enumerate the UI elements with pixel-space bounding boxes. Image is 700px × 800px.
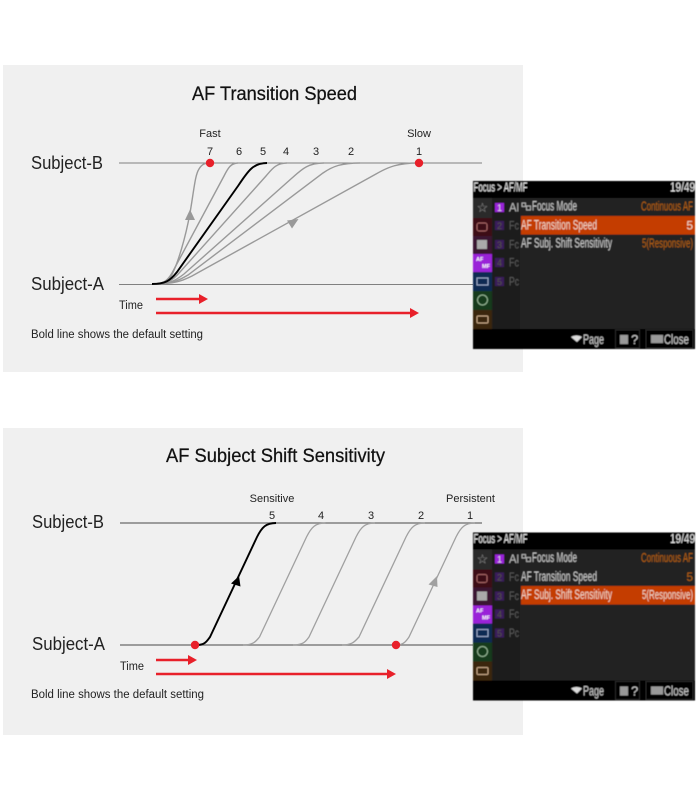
speed labels: 6	[236, 146, 242, 158]
chart: shift curves	[243, 523, 475, 645]
menu main list	[520, 550, 695, 680]
menu sub-tab column: Al	[509, 200, 519, 214]
menu main list: 5	[686, 218, 693, 232]
arrowheads on curves	[185, 210, 298, 228]
menu sub-tab column: 2	[497, 221, 502, 231]
sensitivity labels: 1	[467, 510, 473, 522]
menu sub-tab column: Fc	[509, 218, 519, 232]
sensitivity labels	[250, 493, 495, 522]
sensitivity labels: 3	[368, 510, 374, 522]
time arrows	[156, 294, 419, 318]
speed labels: 1	[416, 146, 422, 158]
red markers	[191, 641, 400, 649]
chart: transition curves	[152, 163, 418, 284]
menu sidebar tabs: ☆	[477, 200, 488, 215]
menu header: Focus > AF/MF	[474, 532, 528, 546]
menu main list: AF Transition Speed	[521, 569, 597, 584]
menu header	[474, 532, 695, 546]
menu sub-tab column: 2	[497, 572, 502, 582]
sensitivity labels: 5	[269, 510, 275, 522]
menu sidebar tabs: ☆	[477, 552, 488, 566]
panel: AF Transition Speed	[3, 65, 523, 372]
time arrows	[156, 655, 396, 679]
menu sidebar tabs: MF	[482, 616, 491, 622]
menu footer: ?	[631, 684, 638, 698]
menu footer: Page	[583, 682, 604, 698]
menu footer: Close	[664, 682, 689, 698]
menu sub-tab column: 1	[497, 554, 502, 564]
menu sub-tab column: Fc	[509, 570, 519, 584]
menu sidebar tabs	[473, 550, 492, 680]
heading: AF Subject Shift Sensitivity: AF Subject Shift Sensitivity	[166, 446, 385, 467]
menu main list: AF Subj. Shift Sensitivity	[521, 587, 612, 602]
label: Subject-A: Subject-A	[31, 274, 104, 294]
menu sub-tab column	[492, 198, 520, 329]
camera menu: AF Transition Speed selected	[473, 180, 695, 349]
icon: focus mode	[522, 203, 530, 210]
menu sub-tab column: Pc	[509, 626, 519, 640]
sensitivity labels: Persistent	[446, 493, 495, 505]
note: Bold line shows the default setting	[31, 329, 203, 341]
menu main list: Focus Mode	[532, 550, 577, 565]
subject lines	[119, 163, 482, 284]
menu sub-tab column: Fc	[509, 238, 519, 252]
menu sub-tab column: Fc	[509, 256, 519, 270]
menu sidebar tabs: MF	[482, 264, 491, 270]
menu sidebar tabs: AF	[476, 608, 484, 614]
gray arrowhead	[428, 576, 438, 587]
sensitivity labels: 4	[318, 510, 324, 522]
menu sub-tab column: 5	[497, 277, 502, 287]
speed labels: Slow	[407, 128, 431, 140]
bold default curve	[152, 163, 267, 284]
menu sub-tab column: Pc	[509, 274, 519, 288]
menu sub-tab column	[492, 550, 520, 680]
subject lines	[120, 523, 482, 645]
menu main list: Focus Mode	[532, 198, 577, 214]
label: Time: Time	[120, 661, 144, 673]
menu main list: 5	[686, 570, 693, 584]
label: Subject-B: Subject-B	[32, 512, 104, 532]
camera menu: AF Subj. Shift Sensitivity selected	[473, 532, 695, 700]
menu sub-tab column: Fc	[509, 589, 519, 603]
menu sub-tab column: 5	[497, 628, 502, 638]
menu main list	[520, 198, 695, 329]
menu footer: ?	[631, 332, 638, 347]
speed labels: 2	[348, 146, 354, 158]
menu sub-tab column: 1	[497, 203, 502, 213]
heading: AF Transition Speed: AF Transition Speed	[192, 84, 357, 105]
menu sub-tab column: 4	[497, 258, 502, 268]
icon: focus mode	[522, 554, 530, 562]
red markers	[206, 159, 423, 167]
speed labels: 5	[260, 146, 266, 158]
menu footer	[473, 680, 695, 700]
menu sidebar tabs	[473, 198, 492, 329]
speed labels: 7	[207, 146, 213, 158]
menu sub-tab column: 3	[497, 240, 502, 250]
menu main list: AF Transition Speed	[521, 218, 597, 232]
menu sub-tab column: Al	[509, 552, 519, 566]
menu main list: AF Subj. Shift Sensitivity	[521, 236, 612, 250]
label: Subject-B: Subject-B	[31, 153, 103, 173]
panel: AF Subject Shift Sensitivity	[3, 428, 523, 735]
sensitivity labels: Sensitive	[250, 493, 294, 505]
menu footer	[473, 329, 695, 349]
speed labels	[199, 128, 431, 158]
menu header	[474, 180, 695, 194]
bold default curve	[197, 523, 276, 645]
note: Bold line shows the default setting	[31, 689, 204, 701]
label: Subject-A: Subject-A	[32, 634, 105, 654]
menu footer: Page	[583, 331, 604, 347]
speed labels: 4	[283, 146, 289, 158]
menu sub-tab column: 3	[497, 592, 502, 602]
menu sub-tab column: Fc	[509, 607, 519, 621]
label: Time: Time	[119, 300, 143, 312]
menu sub-tab column: 4	[497, 610, 502, 620]
speed labels: 3	[313, 146, 319, 158]
sensitivity labels: 2	[418, 510, 424, 522]
menu header: Focus > AF/MF	[474, 180, 528, 194]
speed labels: Fast	[199, 128, 221, 140]
menu footer: Close	[664, 331, 689, 347]
menu sidebar tabs: AF	[476, 257, 484, 263]
arrowheads on curves	[231, 576, 240, 586]
